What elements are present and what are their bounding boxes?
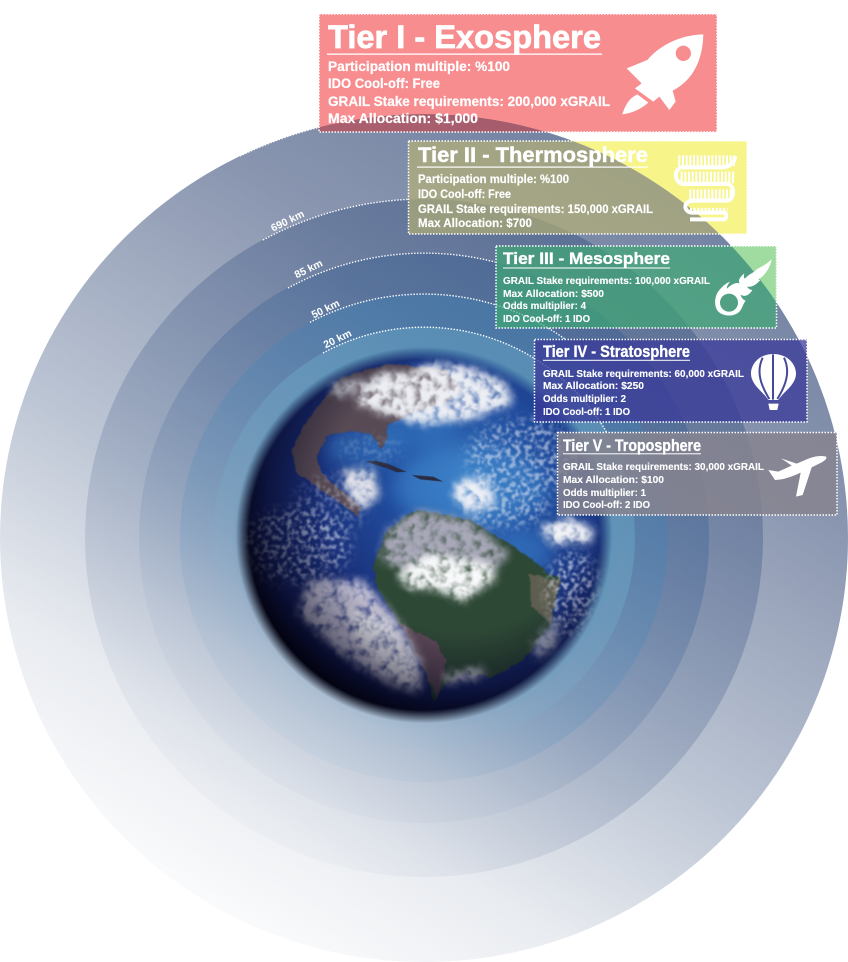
land: caribbean islands bbox=[367, 461, 443, 482]
label: 20 km: 20 km bbox=[322, 327, 354, 351]
text: tier II details: IDO Cool-off: Free bbox=[418, 189, 511, 201]
text: tier II details: Max Allocation: $700 bbox=[418, 218, 532, 230]
icon: airplane bbox=[768, 456, 826, 497]
label: 85 km: 85 km bbox=[293, 257, 325, 281]
text: tier V details: Odds multiplier: 1 bbox=[563, 487, 646, 499]
text: tier IV details: IDO Cool-off: 1 IDO bbox=[543, 406, 630, 418]
panel: tier IV stratosphere bbox=[534, 340, 807, 422]
heading: tier II: Tier II - Thermosphere bbox=[418, 144, 648, 167]
text: tier V details: GRAIL Stake requirements: 30,000 xGRAIL bbox=[563, 461, 765, 473]
text: tier I details: IDO Cool-off: Free bbox=[328, 76, 440, 91]
icon: rocket bbox=[622, 34, 703, 114]
heading: tier I: Tier I - Exosphere bbox=[328, 19, 601, 55]
text: tier I details: Participation multiple: %100 bbox=[328, 59, 510, 74]
text: tier V details: Max Allocation: $100 bbox=[563, 474, 664, 486]
text: tier II details: GRAIL Stake requirements: 150,000 xGRAIL bbox=[418, 204, 653, 216]
text: tier II details bbox=[418, 174, 653, 230]
altitude arc: 50 km bbox=[288, 253, 495, 288]
text: tier IV details bbox=[543, 368, 745, 418]
panel: tier II thermosphere bbox=[408, 141, 747, 234]
clouds: speckled bbox=[237, 420, 600, 637]
altitude arc: 20 km inner bbox=[323, 327, 607, 433]
text: tier IV details: Max Allocation: $250 bbox=[543, 380, 644, 392]
text: tier III details bbox=[503, 275, 711, 325]
text: tier I details bbox=[328, 59, 610, 126]
land: andes bbox=[400, 623, 447, 698]
altitude arc: 20 km outer bbox=[310, 294, 565, 339]
text: tier I details: GRAIL Stake requirements: 200,000 xGRAIL bbox=[328, 94, 610, 109]
text: tier III details: Max Allocation: $500 bbox=[503, 288, 604, 300]
text: tier I details: Max Allocation: $1,000 bbox=[328, 111, 478, 126]
land: north america bbox=[292, 363, 463, 517]
text: tier III details: Odds multiplier: 4 bbox=[503, 300, 586, 312]
heading: tier V: Tier V - Troposphere bbox=[563, 437, 701, 455]
panel: tier I exosphere bbox=[319, 14, 717, 132]
text: tier III details: GRAIL Stake requirements: 100,000 xGRAIL bbox=[503, 275, 711, 287]
label: 50 km: 50 km bbox=[310, 297, 342, 321]
bright ocean glow bbox=[323, 403, 553, 577]
heading: tier III: Tier III - Mesosphere bbox=[503, 250, 670, 268]
text: tier IV details: GRAIL Stake requirements: 60,000 xGRAIL bbox=[543, 368, 745, 380]
altitude arc: 690 km bbox=[240, 128, 318, 156]
altitude arc: 85 km bbox=[263, 199, 408, 240]
heading: tier IV: Tier IV - Stratosphere bbox=[543, 343, 690, 361]
land: south america bbox=[373, 510, 560, 702]
text: tier IV details: Odds multiplier: 2 bbox=[543, 393, 626, 405]
panel: tier V troposphere bbox=[558, 432, 837, 515]
icon: comet bbox=[715, 259, 772, 316]
clouds: dense cover bbox=[297, 363, 595, 693]
icon: hot air balloon bbox=[751, 354, 796, 410]
text: tier III details: IDO Cool-off: 1 IDO bbox=[503, 313, 590, 325]
label: 690 km: 690 km bbox=[269, 208, 306, 235]
text: tier V details bbox=[563, 461, 765, 511]
earth globe bbox=[236, 347, 612, 723]
night side shading bbox=[236, 347, 612, 723]
icon: thermosphere coils bbox=[676, 156, 735, 219]
text: tier V details: IDO Cool-off: 2 IDO bbox=[563, 499, 650, 511]
panel: tier III mesosphere bbox=[496, 246, 776, 328]
text: tier II details: Participation multiple: %100 bbox=[418, 174, 569, 186]
